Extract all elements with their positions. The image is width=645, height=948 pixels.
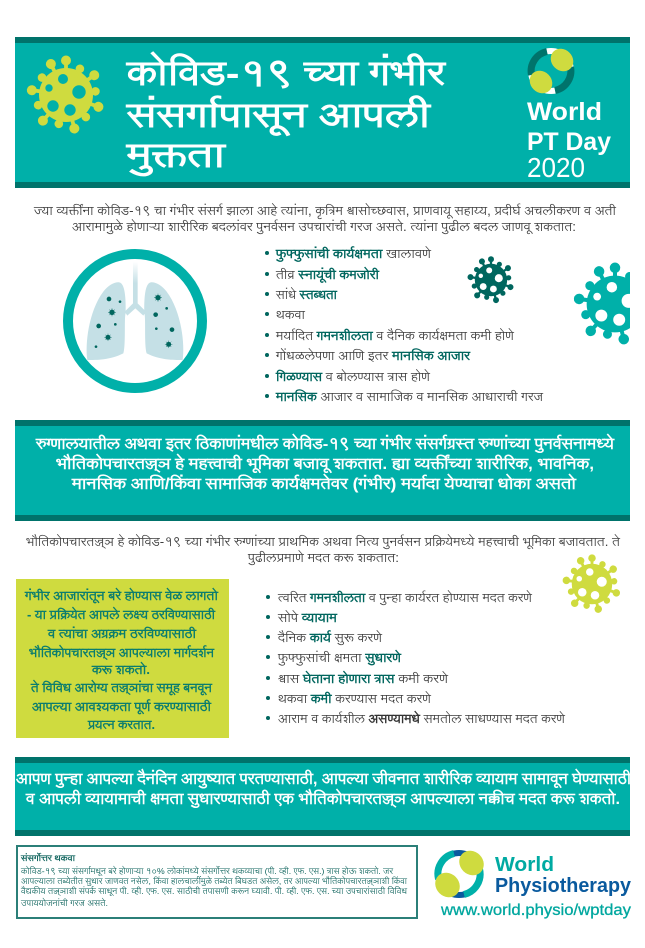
icon: lungs in ring — [68, 254, 202, 388]
panel: yellow callout: भौतिकोपचारतज्ज्ञ आपल्याला मार्गदर्शन — [28, 644, 215, 660]
list: symptoms: मानसिक आजार व सामाजिक व मानसिक आधाराची गरज — [275, 389, 544, 404]
panel: yellow callout: ते विविध आरोग्य तज्ज्ञांचा समूह बनवून — [30, 679, 213, 696]
icon: dark virus — [467, 256, 514, 304]
list: symptoms: मर्यादित गमनशीलता व दैनिक कार्यक्षमता कमी होणे — [275, 328, 515, 343]
callout band: role of physiotherapists: रुग्णालयातील अथवा इतर ठिकाणांमधील कोविड-१९ च्या गंभीर संसर्गग्रस्त रुग्णांच्या पुनर्वसनामध्ये — [35, 433, 615, 454]
callout band: role of physiotherapists: भौतिकोपचारतज्ज्ञ हे महत्त्वाची भूमिका बजावू शकतात. ह्या व्यक्तींच्या शारीरिक, भावनिक, — [55, 453, 594, 473]
intro paragraph — [33, 203, 617, 234]
paragraph: how physiotherapists help: पुढीलप्रमाणे मदत करू शकतात: — [247, 550, 399, 565]
panel: post-infection fatigue note: कोविड-१९ च्या संसर्गामधून बरे होणाऱ्या १०% लोकांमध्ये संसर्गोत्तर थकव्याचा (पी. व्ही. एफ. एस.) त्रास होऊ शकतो. जर — [20, 866, 394, 876]
list: symptoms: फुफ्फुसांची कार्यक्षमता खालावणे — [275, 245, 432, 262]
icon: yellow virus — [26, 56, 105, 135]
list: symptoms — [265, 245, 544, 404]
World Physiotherapy logo: World — [495, 854, 554, 876]
list: ways to help: थकवा कमी करण्यास मदत करणे — [278, 691, 432, 706]
header banner — [15, 37, 630, 188]
list: symptoms: थकवा — [276, 308, 306, 322]
panel: post-infection fatigue note: आपल्याला तब्येतीत सुधार जाणवत नसेल, किंवा हालचालींमुळे तब्येत बिघडत असेल, तर आपल्या भौतिकोपचारतज्ज्ञाशी किंवा — [21, 876, 408, 886]
icon: yellow virus small — [562, 554, 621, 614]
panel: yellow callout: - या प्रक्रियेत आपले लक्ष्य ठरविण्यासाठी — [27, 606, 216, 622]
title — [126, 51, 447, 177]
intro paragraph: आरामामुळे होणाऱ्या शारीरिक बदलांवर पुनर्वसन उपचारांची गरज असते. त्यांना पुढील बदल जाणवू शकतात: — [72, 219, 576, 234]
panel: yellow callout — [16, 579, 229, 738]
list: symptoms: तीव्र स्नायूंची कमजोरी — [275, 266, 380, 284]
World PT Day logo: World — [527, 98, 602, 126]
World Physiotherapy logo — [430, 846, 632, 919]
panel: yellow callout: करू शकतो. — [91, 661, 150, 677]
intro paragraph: ज्या व्यक्तींना कोविड-१९ चा गंभीर संसर्ग झाला आहे त्यांना, कृत्रिम श्वासोच्छवास, प्राणवायू सहाय्य, प्रदीर्घ अचलीकरण व अती — [33, 203, 617, 219]
title: कोविड-१९ च्या गंभीर — [126, 51, 447, 93]
list: symptoms: गोंधळलेपणा आणि इतर मानसिक आजार — [275, 348, 471, 363]
list: ways to help — [266, 590, 566, 726]
icon: teal virus clipped — [574, 262, 630, 344]
panel: yellow callout: प्रयत्न करतात. — [87, 718, 155, 732]
title: संसर्गापासून आपली — [126, 95, 431, 137]
list: ways to help: श्वास घेताना होणारा त्रास कमी करणे — [278, 670, 449, 686]
panel: yellow callout: आपल्या आवश्यकता पूर्ण करण्यासाठी — [31, 698, 212, 715]
callout band: closing message: आपण पुन्हा आपल्या दैनंदिन आयुष्यात परतण्यासाठी, आपल्या जीवनात शारीरिक व्यायाम सामावून घेण्यासाठी — [15, 768, 632, 790]
list: symptoms: सांधे स्तब्धता — [275, 287, 338, 302]
panel: yellow callout: गंभीर आजारांतून बरे होण्यास वेळ लागतो — [24, 587, 219, 604]
list: ways to help: दैनिक कार्य सुरू करणे — [277, 629, 383, 645]
list: symptoms: गिळण्यास व बोलण्यास त्रास होणे — [275, 368, 431, 384]
World PT Day logo: 2020 — [527, 152, 585, 183]
list: ways to help: आराम व कार्यशील असण्यामधे समतोल साधण्यास मदत करणे — [278, 710, 566, 726]
World PT Day logo — [525, 44, 611, 183]
World Physiotherapy logo: Physiotherapy — [495, 875, 632, 897]
callout band: role of physiotherapists: मानसिक आणि/किंवा सामाजिक कार्यक्षमतेवर (गंभीर) मर्यादा येण्याचा धोका असतो — [71, 473, 577, 493]
paragraph: how physiotherapists help: भौतिकोपचारतज्ज्ञ हे कोविड-१९ च्या गंभीर रुग्णांच्या प्राथमिक अथवा नित्य पुनर्वसन प्रक्रियेमध्ये महत्त्वाची भूमिका बजावतात. ते — [26, 534, 621, 549]
title: मुक्तता — [126, 137, 227, 177]
list: ways to help: त्वरित गमनशीलता व पुन्हा कार्यरत होण्यास मदत करणे — [277, 590, 533, 605]
list: ways to help: फुफ्फुसांची क्षमता सुधारणे — [277, 649, 402, 666]
World Physiotherapy logo: www.world.physio/wptday — [440, 902, 631, 919]
panel: post-infection fatigue note: वैद्यकीय तज्ज्ञाशी संपर्क साधून पी. व्ही. एफ. एस. साठीची तपासणी करून घ्यावी. पी. व्ही. एफ. एस. च्या उपचारांसाठी विविध — [20, 886, 408, 896]
callout band: role of physiotherapists — [15, 420, 630, 521]
paragraph: how physiotherapists help — [26, 534, 621, 565]
callout band: closing message — [15, 757, 632, 836]
list: ways to help: सोपे व्यायाम — [277, 610, 338, 625]
panel: post-infection fatigue note: उपाययोजनांची गरज असते. — [20, 898, 108, 908]
callout band: closing message: व आपली व्यायामाची क्षमता सुधारण्यासाठी एक भौतिकोपचारतज्ज्ञ आपल्याला नक्कीच मदत करू शकतो. — [25, 788, 620, 809]
panel: post-infection fatigue note — [17, 846, 417, 918]
World PT Day logo: PT Day — [527, 128, 611, 156]
panel: post-infection fatigue note: संसर्गोत्तर थकवा — [20, 853, 76, 863]
panel: yellow callout: व त्यांचा अग्रक्रम ठरविण्यासाठी — [47, 625, 197, 641]
